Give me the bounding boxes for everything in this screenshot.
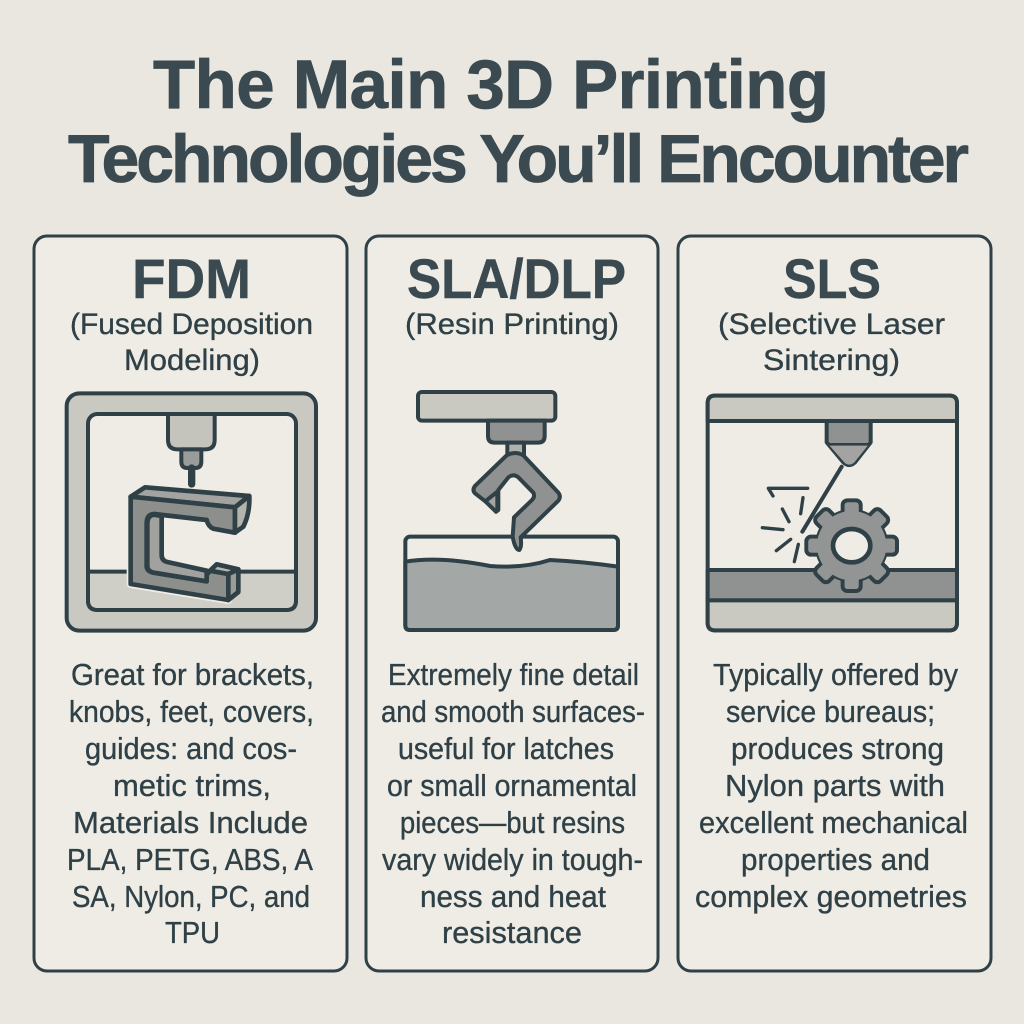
title: Technologies You’ll Encounter <box>68 121 969 197</box>
sparks <box>762 488 808 562</box>
body text <box>67 657 314 950</box>
heading: SLA/DLP <box>405 247 626 341</box>
body text <box>695 657 968 914</box>
heading: FDM: FDM <box>132 247 251 310</box>
body text: metic trims, <box>113 768 271 803</box>
body text <box>381 657 645 950</box>
gear <box>806 500 897 591</box>
body text: SA, Nylon, PC, and <box>72 879 310 914</box>
panel: SLS <box>678 236 991 971</box>
laser beam <box>802 467 842 532</box>
body text: Great for brackets, <box>71 657 314 692</box>
body text: vary widely in tough- <box>382 842 643 877</box>
body text: guides: and cos- <box>85 731 297 766</box>
body text: useful for latches <box>398 731 614 766</box>
heading: SLA/DLP: (Resin Printing) <box>405 308 619 341</box>
heading: SLS: SLS <box>783 247 881 310</box>
heading: SLS <box>718 247 945 377</box>
heading: FDM <box>70 247 313 377</box>
heading: SLA/DLP: SLA/DLP <box>407 247 626 310</box>
body text: complex geometries <box>695 879 967 914</box>
body text: or small ornamental <box>387 768 637 803</box>
icon: SLS laser sintering a gear <box>708 396 957 630</box>
heading: SLS: Sintering) <box>763 344 900 377</box>
icon: resin printer with claw <box>405 392 618 630</box>
body text: and smooth surfaces- <box>381 694 645 729</box>
body text: produces strong <box>731 731 944 766</box>
body text: Materials Include <box>73 805 308 840</box>
body text: PLA, PETG, ABS, A <box>67 842 313 877</box>
body text: pieces—but resins <box>400 805 625 840</box>
body text: Typically offered by <box>713 657 958 692</box>
body text: service bureaus; <box>726 694 935 729</box>
title: The Main 3D Printing <box>153 46 829 123</box>
body text: ness and heat <box>420 879 606 914</box>
heading: FDM: (Fused Deposition <box>70 308 313 341</box>
icon: FDM printer with bracket <box>67 393 316 631</box>
title <box>68 46 969 197</box>
heading: SLS: (Selective Laser <box>718 308 945 341</box>
body text: properties and <box>741 842 930 877</box>
body text: excellent mechanical <box>699 805 968 840</box>
body text: Extremely fine detail <box>388 657 639 692</box>
body text: Nylon parts with <box>725 768 945 803</box>
body text: resistance <box>442 915 582 950</box>
body text: knobs, feet, covers, <box>69 694 314 729</box>
panel: SLA/DLP <box>366 236 658 971</box>
heading: FDM: Modeling) <box>124 344 260 377</box>
body text: TPU <box>165 915 220 950</box>
panel: FDM <box>34 236 347 971</box>
